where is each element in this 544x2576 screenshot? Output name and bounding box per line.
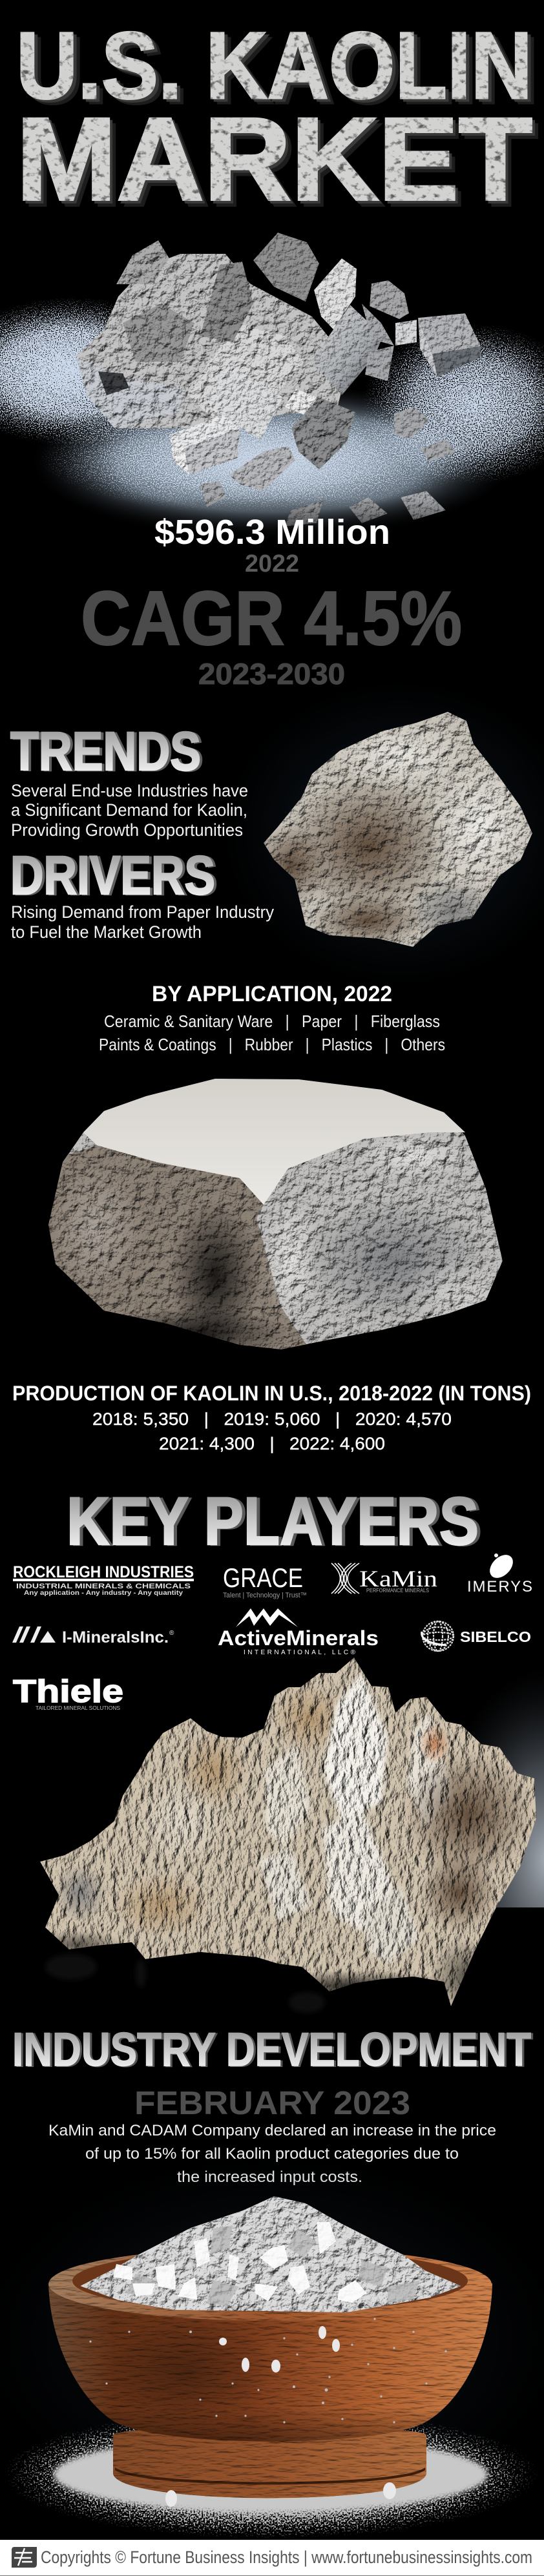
chunk: dark boulder bbox=[291, 397, 355, 470]
footer bbox=[0, 2540, 544, 2576]
bowl foot bbox=[113, 2426, 426, 2498]
bowl rim bbox=[48, 2247, 492, 2321]
development text: the increased input costs. bbox=[177, 2168, 362, 2186]
application list: Paints & Coatings | Rubber | Plastics | Others bbox=[99, 1035, 445, 1054]
powder ring on ground bbox=[0, 2409, 544, 2545]
illustration: wooden bowl of salt-like kaolin bbox=[0, 2151, 544, 2545]
logo: Rockleigh Industries: Any application - Any industry - Any quantity bbox=[24, 1590, 183, 1597]
logo: I-Minerals: ® bbox=[169, 1630, 174, 1637]
rubble bbox=[200, 304, 455, 526]
trends text: Several End-use Industries have bbox=[11, 781, 248, 800]
trends text: a Significant Demand for Kaolin, bbox=[11, 800, 247, 820]
stat: CAGR: CAGR 4.5% bbox=[81, 576, 462, 661]
logo: Rockleigh Industries bbox=[13, 1563, 194, 1597]
faint reflections bbox=[45, 1954, 325, 2013]
illustration: crystalline kaolin cluster bbox=[40, 1657, 544, 2013]
bowl body bbox=[45, 2280, 497, 2451]
date: february 2023: FEBRUARY 2023 bbox=[134, 2084, 410, 2121]
logo: KaMin bbox=[331, 1563, 437, 1594]
drivers text: Rising Demand from Paper Industry bbox=[11, 902, 274, 922]
application list bbox=[99, 1012, 445, 1054]
chunk: small block bbox=[284, 389, 317, 415]
title line: MARKET: MARKET bbox=[16, 93, 532, 225]
panel: drivers bbox=[10, 845, 274, 942]
logo: I-Minerals: I-MineralsInc. bbox=[62, 1628, 169, 1646]
footer logo bbox=[12, 2547, 37, 2568]
heading: key players: KEY PLAYERS bbox=[67, 1484, 479, 1559]
chunk: tall slab bbox=[314, 258, 357, 329]
logo: Thiele: Thiele bbox=[13, 1674, 123, 1709]
heading: trends: TRENDS bbox=[13, 722, 204, 782]
logo: Rockleigh Industries: ROCKLEIGH INDUSTRIES bbox=[13, 1563, 194, 1581]
illustration: flat-topped kaolin block bbox=[45, 1075, 507, 1360]
logo: Thiele: TAILORED MINERAL SOLUTIONS bbox=[36, 1705, 120, 1711]
chunk: small rock bbox=[370, 280, 409, 319]
development text: of up to 15% for all Kaolin product categories due to bbox=[85, 2145, 459, 2163]
illustration: kaolin powder and chunks bbox=[0, 233, 544, 556]
rock top face bbox=[83, 1079, 465, 1205]
logo: Grace: Talent | Technology | Trust™ bbox=[223, 1592, 307, 1599]
chunk: wedge bbox=[205, 364, 283, 440]
illustration: rough kaolin rock bbox=[264, 712, 533, 947]
salt flecks on bowl bbox=[89, 2318, 447, 2507]
logo: KaMin: PERFORMANCE MINERALS bbox=[366, 1588, 429, 1594]
stat: base year: 2022 bbox=[245, 550, 299, 577]
stat: forecast period: 2023-2030 bbox=[198, 658, 345, 691]
chunk: right brick bbox=[395, 313, 481, 377]
logo: I-Minerals bbox=[12, 1626, 174, 1646]
heading: trends: TRENDS bbox=[10, 721, 201, 782]
logo: Rockleigh Industries: INDUSTRIAL MINERALS & CHEMICALS bbox=[16, 1583, 191, 1590]
fade to black below the pile bbox=[0, 497, 544, 556]
drivers text bbox=[11, 902, 274, 942]
market size bbox=[154, 513, 390, 577]
application list: Ceramic & Sanitary Ware | Paper | Fiberglass bbox=[104, 1012, 440, 1031]
heading: production: PRODUCTION OF KAOLIN IN U.S., 2018-2022 (IN TONS) bbox=[12, 1382, 531, 1405]
logo: Imerys: IMERYS bbox=[467, 1578, 532, 1595]
panel: trends bbox=[10, 721, 248, 840]
logo: Imerys bbox=[467, 1550, 532, 1595]
chunk: white brick bbox=[169, 415, 240, 475]
development text: KaMin and CADAM Company declared an increase in the price bbox=[48, 2122, 496, 2139]
panel: production of kaolin bbox=[12, 1382, 531, 1453]
logo: Active Minerals: ActiveMinerals bbox=[218, 1626, 379, 1650]
logo: KaMin: KaMin bbox=[359, 1566, 437, 1592]
stat: market size value: $596.3 Million bbox=[154, 513, 390, 552]
chunk: centre slab bbox=[311, 305, 383, 395]
panel: by application bbox=[99, 982, 445, 1054]
production figures 2018 to 2020: 2018: 5,350 | 2019: 5,060 | 2020: 4,570 bbox=[92, 1409, 452, 1429]
heading: key players: KEY PLAYERS bbox=[70, 1484, 482, 1560]
drivers text: to Fuel the Market Growth bbox=[11, 922, 202, 942]
powder mound bbox=[76, 240, 349, 428]
trends text: Providing Growth Opportunities bbox=[11, 820, 243, 840]
panel: industry development bbox=[12, 2024, 533, 2186]
production figures 2021 and 2022: 2021: 4,300 | 2022: 4,600 bbox=[159, 1434, 385, 1453]
trends text bbox=[11, 781, 248, 840]
logo: Sibelco bbox=[422, 1621, 531, 1651]
title line: MARKET: MARKET bbox=[19, 96, 535, 227]
heading: by application: BY APPLICATION, 2022 bbox=[152, 982, 392, 1006]
title: U.S. Kaolin Market bbox=[16, 13, 539, 231]
title line: MARKET: MARKET bbox=[22, 99, 538, 231]
logo: Grace: GRACE bbox=[223, 1563, 303, 1593]
chunk: top boulder bbox=[253, 233, 319, 302]
development text bbox=[48, 2122, 496, 2186]
salt heap bbox=[80, 2196, 461, 2312]
heading: drivers: DRIVERS bbox=[10, 845, 215, 906]
logo: Active Minerals bbox=[218, 1608, 379, 1656]
CAGR block bbox=[81, 576, 462, 691]
chunk: lower piece bbox=[229, 446, 295, 491]
logo: Sibelco: SIBELCO bbox=[460, 1628, 531, 1645]
heading: drivers: DRIVERS bbox=[13, 846, 218, 906]
logo: Active Minerals: INTERNATIONAL, LLC® bbox=[244, 1649, 356, 1656]
